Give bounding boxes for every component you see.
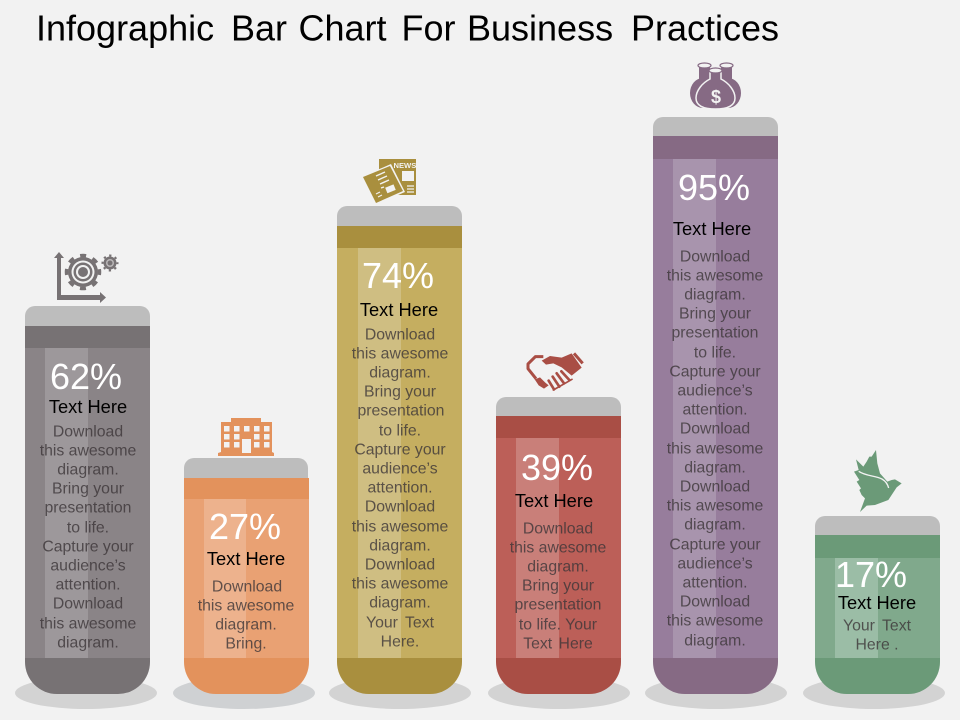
heading: Text Here xyxy=(207,548,285,569)
body text: diagram. xyxy=(684,286,746,304)
body text: this awesome xyxy=(667,268,763,284)
body text: attention. xyxy=(682,574,748,592)
body text: audience’s xyxy=(50,558,126,574)
icon: chart axes with gears xyxy=(54,252,118,303)
heading: Text Here xyxy=(673,218,751,239)
body text: Here . xyxy=(855,636,899,654)
body text: this awesome xyxy=(198,598,294,614)
body text: Download xyxy=(365,556,435,574)
body text: Capture your xyxy=(354,442,446,458)
body text: Capture your xyxy=(669,364,761,380)
panel: bar 95% purple xyxy=(645,117,787,709)
body text: Your Text xyxy=(843,618,912,634)
body text: presentation xyxy=(672,324,758,342)
body text: attention. xyxy=(56,576,120,594)
body text xyxy=(510,520,606,652)
body text: diagram. xyxy=(684,632,746,650)
body text xyxy=(40,424,136,652)
heading: Text Here xyxy=(515,490,593,511)
body text: presentation xyxy=(45,500,131,516)
body text: this awesome xyxy=(352,346,448,362)
icon: dove xyxy=(854,450,902,512)
body text: presentation xyxy=(358,402,444,420)
body text: Bring your xyxy=(522,578,594,594)
title: Bar xyxy=(231,8,287,48)
icon: newspapers xyxy=(361,159,416,205)
body text: this awesome xyxy=(40,442,136,460)
heading: Text Here xyxy=(838,592,916,613)
percentage 74%: 74% xyxy=(362,255,434,296)
body text: Download xyxy=(680,420,750,438)
body text: presentation xyxy=(515,596,601,614)
panel: bar 39% red xyxy=(488,397,630,709)
body text: diagram. xyxy=(57,634,119,652)
icon: money bags xyxy=(690,63,741,109)
body text: diagram. xyxy=(369,538,431,554)
body text: Text Here xyxy=(523,636,593,652)
body text: attention. xyxy=(368,480,432,496)
panel: bar 27% orange xyxy=(173,458,315,709)
percentage 27%: 27% xyxy=(209,506,281,547)
body text: Download xyxy=(680,248,750,266)
title: Chart xyxy=(298,8,387,48)
body text xyxy=(352,326,448,650)
body text: diagram. xyxy=(369,594,431,612)
body text: diagram. xyxy=(684,460,746,476)
body text: Bring your xyxy=(679,306,751,322)
body text: Download xyxy=(53,596,123,612)
body text: Your Text xyxy=(366,614,435,632)
body text: diagram. xyxy=(57,462,119,478)
body text: this awesome xyxy=(352,518,448,536)
percentage 62%: 62% xyxy=(50,356,122,397)
percentage 39%: 39% xyxy=(521,447,593,488)
title: For xyxy=(402,8,456,48)
body text: to life. xyxy=(694,344,736,362)
body text: Bring. xyxy=(225,636,267,652)
icon: office building xyxy=(218,418,274,456)
body text: audience’s xyxy=(677,556,753,572)
panel: bar 62% grey xyxy=(15,306,157,709)
title: Practices xyxy=(631,8,779,48)
body text: Download xyxy=(53,424,123,440)
title: Business xyxy=(467,8,613,48)
body text: this awesome xyxy=(510,540,606,556)
body text: this awesome xyxy=(667,440,763,458)
body text: Here. xyxy=(381,634,419,650)
body text: Capture your xyxy=(42,538,134,556)
icon: newspapers: NEWS xyxy=(394,161,416,170)
icon: money bags: $ xyxy=(711,87,721,107)
body text: Bring your xyxy=(364,384,436,400)
body text: to life. xyxy=(379,422,421,440)
body text: this awesome xyxy=(40,616,136,632)
body text: to life. xyxy=(67,520,109,536)
title: Infographic xyxy=(36,8,214,48)
body text: diagram. xyxy=(527,558,589,576)
body text: this awesome xyxy=(667,612,763,630)
body text: diagram. xyxy=(369,364,431,382)
body text: Download xyxy=(523,520,593,538)
body text: attention. xyxy=(682,402,748,418)
heading: Text Here xyxy=(49,396,127,417)
percentage 17%: 17% xyxy=(835,554,907,595)
body text: audience’s xyxy=(362,460,438,478)
body text: diagram. xyxy=(684,516,746,534)
body text: Download xyxy=(680,594,750,610)
body text: this awesome xyxy=(667,498,763,514)
body text: Download xyxy=(680,478,750,496)
icon: handshake xyxy=(528,353,583,390)
percentage 95%: 95% xyxy=(678,167,750,208)
panel: bar 74% gold xyxy=(329,206,471,709)
body text: Download xyxy=(212,578,282,596)
body text: audience’s xyxy=(677,382,753,400)
panel: bar 17% green xyxy=(803,516,945,709)
body text xyxy=(198,578,294,652)
body text xyxy=(843,618,912,654)
body text: diagram. xyxy=(215,616,277,634)
body text: Bring your xyxy=(52,480,124,498)
body text: Capture your xyxy=(669,536,761,554)
body text: this awesome xyxy=(352,576,448,592)
body text: Download xyxy=(365,326,435,344)
body text xyxy=(667,248,763,650)
body text: to life. Your xyxy=(519,616,597,634)
body text: Download xyxy=(365,498,435,516)
heading: Text Here xyxy=(360,299,438,320)
